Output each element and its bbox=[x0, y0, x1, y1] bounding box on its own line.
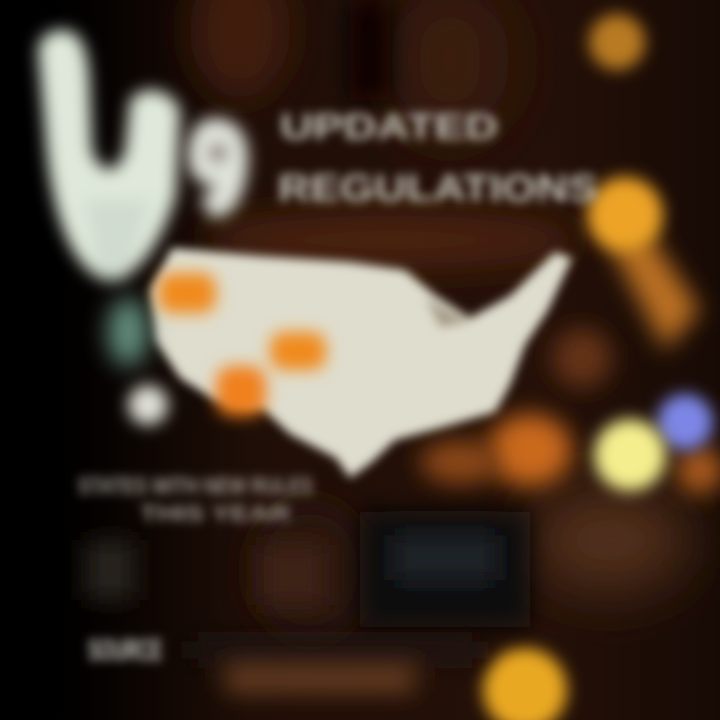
title line 2: REGULATIONS bbox=[278, 168, 598, 210]
teal coast strip bbox=[108, 298, 148, 366]
large logo shape: U bbox=[38, 30, 180, 280]
subheading line 2: THIS YEAR bbox=[140, 501, 290, 526]
large logo shape: 9 bbox=[187, 118, 248, 218]
orange state: south bbox=[216, 366, 266, 416]
subheading line 1: STATES WITH NEW RULES bbox=[78, 473, 313, 500]
footer label: SOURCE bbox=[88, 634, 162, 667]
panel: dark detail box bbox=[360, 512, 530, 627]
title bbox=[278, 106, 598, 210]
map: United States bbox=[150, 248, 572, 478]
orange state: northwest bbox=[158, 273, 216, 313]
white marker bbox=[128, 385, 168, 425]
title line 1: UPDATED bbox=[280, 106, 498, 147]
footer strip bbox=[190, 640, 480, 692]
panel: left detail text bbox=[85, 540, 325, 605]
orange state: central bbox=[270, 332, 326, 370]
subheading bbox=[78, 473, 313, 526]
bokeh lights bbox=[420, 14, 720, 720]
